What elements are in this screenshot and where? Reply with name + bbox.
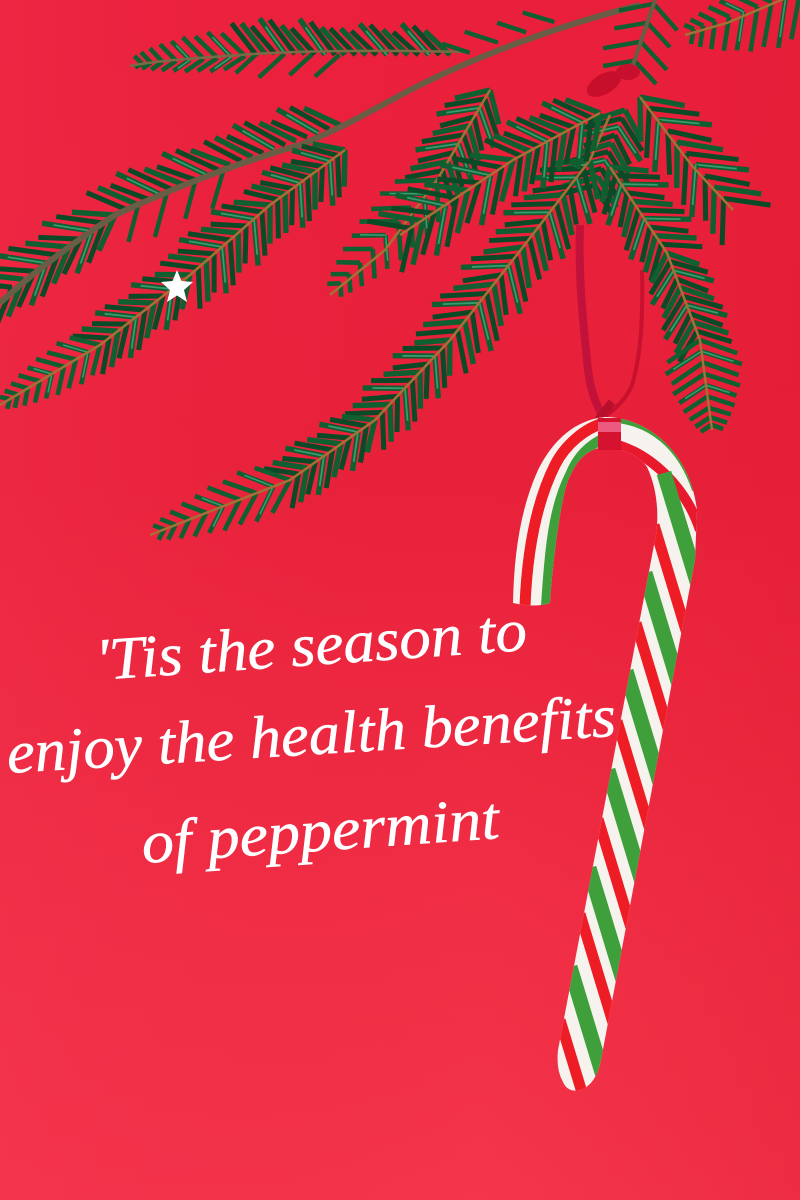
branch: main stem left: [0, 2, 640, 328]
branch: sprig with star: [0, 125, 367, 423]
branch: top stub and twigs: [598, 0, 686, 86]
headline text: [5, 597, 618, 876]
branch: top right corner sprig: [679, 0, 800, 75]
branch: upper sprig: [130, 18, 470, 79]
branch: long lower sprig: [146, 97, 656, 557]
ribbon wrap: [598, 418, 621, 450]
branch: middle sprigs: [311, 73, 619, 312]
branch: right sprigs: [582, 73, 775, 435]
icon: white star: [161, 270, 193, 302]
candy cane: [513, 417, 700, 1132]
headline text: 'Tis the season to: [93, 597, 529, 693]
icon: red pin: [583, 64, 640, 102]
headline text: enjoy the health benefits: [5, 683, 618, 786]
headline text: of peppermint: [139, 785, 502, 876]
ribbon loop: [580, 225, 642, 420]
spiral stripes: [560, 473, 698, 1132]
hook stripes: [525, 420, 700, 606]
